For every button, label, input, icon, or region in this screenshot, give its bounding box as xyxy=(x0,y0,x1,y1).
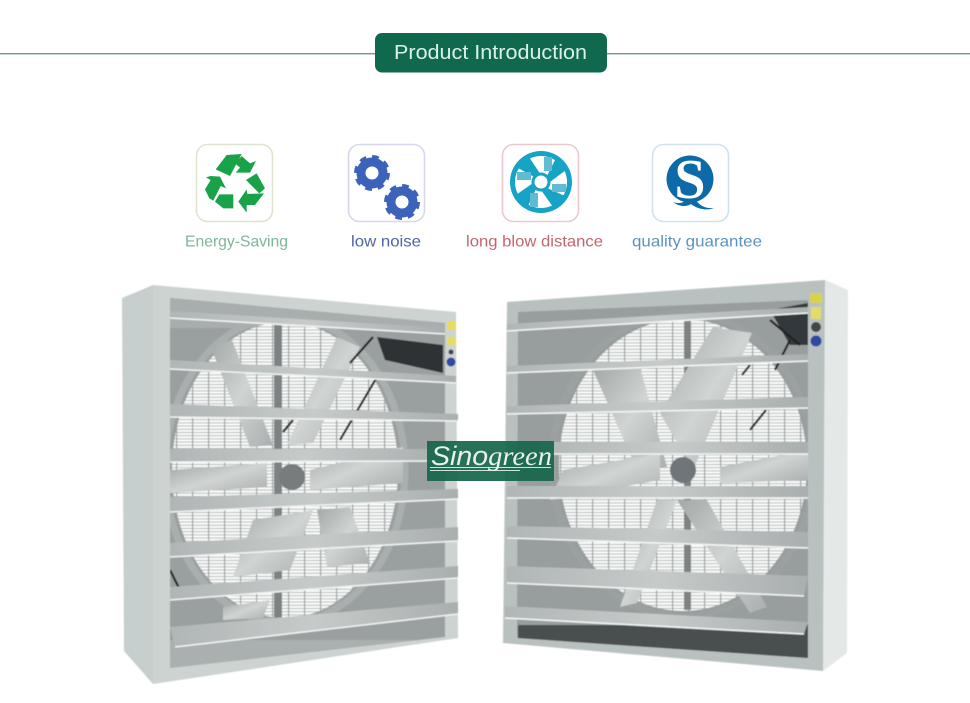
warning labels xyxy=(810,293,822,346)
label: quality guarantee: quality guarantee xyxy=(632,234,762,250)
fan side panel xyxy=(823,280,848,671)
fan side panel xyxy=(122,285,153,684)
louvers xyxy=(170,311,458,647)
louvers xyxy=(505,307,808,634)
fan interior xyxy=(165,290,450,675)
title banner: Product Introduction xyxy=(394,41,587,64)
icon: SQ mark: S xyxy=(674,149,706,211)
watermark logo: Sinogreen xyxy=(431,441,552,471)
fan front frame xyxy=(503,280,825,671)
watermark logo xyxy=(427,441,554,481)
louver lips xyxy=(505,313,808,634)
feature: low noise xyxy=(348,144,424,250)
warning labels xyxy=(446,321,456,366)
fan blades xyxy=(550,327,808,613)
fan blades xyxy=(170,337,403,620)
icon: recycle arrows xyxy=(205,154,265,213)
right fan photo xyxy=(503,280,848,671)
icon: gears xyxy=(356,158,418,218)
fan hub xyxy=(670,457,696,483)
feature: long blow distance xyxy=(466,144,603,250)
fan motor xyxy=(770,303,808,345)
louver lips xyxy=(170,318,458,647)
label: Energy-Saving: Energy-Saving xyxy=(185,234,288,250)
fan guard grid xyxy=(172,322,398,618)
fan hub xyxy=(279,464,305,490)
label: long blow distance: long blow distance xyxy=(466,234,603,250)
icon: fan xyxy=(510,151,572,213)
fan front frame xyxy=(153,285,458,684)
fan guard grid xyxy=(559,319,807,611)
fan struts xyxy=(742,320,800,430)
fan interior xyxy=(510,295,815,665)
fan motor xyxy=(377,337,443,373)
left fan photo xyxy=(122,285,458,684)
feature: energy saving xyxy=(185,144,288,250)
title banner xyxy=(0,33,970,72)
feature: quality guarantee xyxy=(632,144,762,250)
fan struts xyxy=(170,337,377,590)
label: low noise: low noise xyxy=(351,234,421,250)
